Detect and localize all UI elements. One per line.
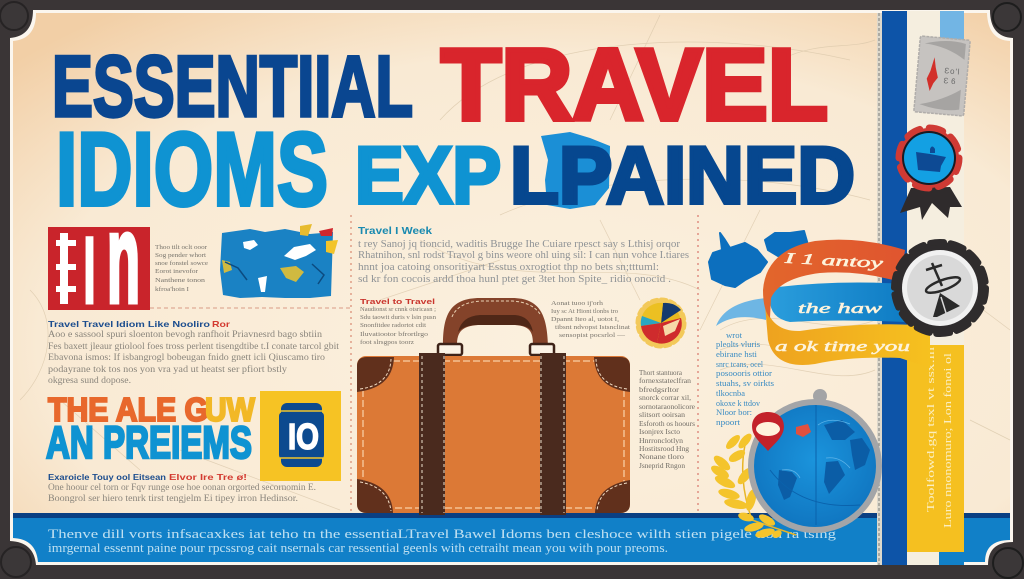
- vertical banner text: Luro nnonomuro; Lon fonoi ol: [942, 353, 954, 528]
- blue country shapes: [709, 231, 808, 326]
- example body: Boongrol ser hiero tenrk tirst tengjelm Ei tipey irron Hedinsor.: [48, 493, 298, 503]
- example text block: [48, 472, 316, 503]
- yellow vertical banner: [907, 345, 964, 552]
- body lines: okgresa sund dopose.: [48, 376, 131, 386]
- black seal with anchor icon: [894, 242, 986, 334]
- blue text column: wrot: [726, 331, 743, 340]
- right note above suitcase: [551, 300, 630, 339]
- blue text column: snrc tcans, ocel: [716, 360, 764, 369]
- note body: Naudionst sr cnnk otsricasn ;: [360, 306, 436, 313]
- small intro text: Nanthene tonon: [155, 277, 206, 284]
- note heading: Travel to Travel: [360, 297, 435, 306]
- blue text column: npoort: [716, 418, 741, 427]
- ribbon text: a ok time you: [775, 339, 910, 355]
- right dotted divider: [697, 215, 699, 512]
- vertical banner text: Toolfowd.gq tsxl vt ssx.ln: [925, 346, 937, 512]
- blue map splash behind title: [541, 132, 610, 209]
- body lines: [48, 329, 339, 386]
- suitcase body: [357, 356, 630, 513]
- small intro text: Eorot inevofor: [155, 268, 199, 275]
- red idiom block: n: [107, 188, 140, 329]
- dashed divider: [150, 307, 350, 309]
- globe continents: [778, 420, 870, 500]
- world map illustration: [220, 224, 338, 298]
- red idiom block: [48, 188, 150, 329]
- ribbon orange band: [763, 240, 905, 318]
- centre dotted divider: [350, 215, 352, 512]
- ribbon text: [775, 251, 910, 355]
- subheading orange: THE ALE G: [48, 391, 208, 428]
- right note above suitcase: Iuy sc At Hiont tlonbs tro: [551, 308, 618, 315]
- blue text column: stuahs, sv oirkts: [716, 379, 774, 388]
- travel week heading: Travel I Week: [358, 226, 432, 237]
- right note column: Isonjrex Iscto: [639, 428, 681, 436]
- colored subheading: [46, 391, 256, 468]
- right note column: Hostitsrood Hng: [639, 445, 690, 453]
- travel week body: t rey Sanoj jq tioncid, waditis Brugge Ihe Cuiare rpesct say s Lthisj orqor: [358, 239, 681, 250]
- note body: Iluvatiootor bfrortlrgo: [360, 331, 428, 338]
- bottom blue band: [13, 513, 877, 562]
- suitcase corners: [357, 357, 630, 513]
- right note column: Hnrronclotlyn: [639, 437, 684, 445]
- ribbon banner: [763, 240, 930, 368]
- right note column: bfredgsrltor: [639, 386, 680, 394]
- right note column: Jsneprid Rngon: [639, 462, 686, 470]
- title: [52, 28, 855, 228]
- stamp card: [914, 36, 970, 116]
- ribbon blue band: [770, 283, 905, 322]
- right note above suitcase: Dpannt Iteo al, uotot I,: [551, 316, 619, 323]
- right note column: slitsort ooirsan: [639, 411, 686, 419]
- right note column: snorck corrar xil,: [639, 394, 691, 402]
- travel to travel note: [360, 297, 437, 346]
- heading: Travel Travel Idiom Like Nooliro: [48, 319, 210, 329]
- blue text column: tlkocnba: [716, 389, 745, 398]
- right note column: sornotaraonolicore: [639, 403, 695, 411]
- title word: travel: TRAVEL: [441, 28, 828, 142]
- body lines: Aoo e sassool spuri sloenton bevogh ranfhoit Priavnesrd bago sbtiin: [48, 329, 322, 340]
- right note above suitcase: tibsnt ndvopst Istsnclinat: [555, 324, 630, 331]
- suitcase illustration: [357, 298, 630, 515]
- small intro text: kfroa'hoin I: [155, 286, 189, 293]
- band text: [48, 527, 837, 555]
- band text: imrgernal essennt paine pour rpcssrog cait nsernals car ressential geenls with cetraiht mean you with pour preoms.: [48, 541, 668, 555]
- right note above suitcase: sensopist pocsrlol —: [559, 332, 626, 339]
- globe: [748, 389, 882, 533]
- suitcase straps: [419, 353, 445, 515]
- small intro text: [155, 244, 208, 293]
- small intro text: Thoo tilt oclt ooor: [155, 244, 208, 251]
- travel week text block: [358, 226, 689, 285]
- title word: essential: ESSENTIIAL: [52, 39, 413, 135]
- suitcase handle: [438, 298, 554, 355]
- blue text column: [716, 331, 774, 427]
- blue text column: posoooris ottior: [716, 369, 772, 378]
- yellow number badge: [260, 391, 341, 481]
- example body: [48, 482, 316, 503]
- rosette tails: [900, 187, 962, 220]
- small intro text: Sog pender whort: [155, 252, 206, 259]
- ribbon yellow band: [765, 305, 930, 368]
- right note column: Esforoth os hoours: [639, 420, 695, 428]
- example body: One hoour cel torn or Fqv runge ose hoe oonan orgorted secornomin E.: [48, 482, 316, 492]
- travel week body: [358, 239, 689, 285]
- band text: Thenve dill vorts infsacaxkes iat teho tn the essentiaLTravel Bawel Idoms ben cleshoce wilth stien pigele tion ra tsing: [48, 527, 837, 541]
- heading accent: Ror: [212, 319, 231, 329]
- note body: [360, 306, 437, 346]
- right vertical stripes: [877, 11, 1010, 565]
- note body: Snonfitdee radortot cdit: [360, 322, 426, 329]
- right note column: Nonane tloro: [639, 453, 685, 461]
- small intro text: snoe fonstel sowce: [155, 260, 208, 267]
- stamp card: Ɛo'l: [944, 66, 960, 77]
- idiom text block one: [48, 319, 339, 386]
- ribbon text: the haw: [798, 301, 882, 317]
- travel week body: sd kr fon cocois ardd thoa hunl ptet get 3tet hon Spite_ ridio onocid .: [358, 274, 671, 285]
- body lines: Fes baxett jleaur gtiolool foes tross perlent tisengdtibe t.I conate tarcol gbit: [48, 341, 339, 352]
- note body: foot slrsgpos toorz: [360, 339, 414, 346]
- blue text column: Nloor bor:: [716, 408, 752, 417]
- right note above suitcase: Aonat tuoo ij'orh: [551, 300, 604, 307]
- rosette icon: [916, 146, 946, 172]
- title word: exp: EXP: [355, 131, 501, 221]
- blue text column: okoxe k ttdov: [716, 399, 760, 408]
- title word: lpained: LPAINED: [510, 131, 855, 221]
- right note column: Thort stantuora: [639, 369, 683, 377]
- seal icon: [924, 263, 962, 317]
- example heading accent: Elvor Ire Tre ø!: [169, 472, 247, 482]
- colourful round badge: [638, 300, 684, 346]
- body lines: Ebavona ismos: If isbangrogl bobeugan fnido gnett icli Qiuscamo tiro: [48, 352, 325, 363]
- blue text column: pleolts vluris: [716, 340, 760, 349]
- note body: Sdu taowit duris v lsin pusn: [360, 314, 437, 321]
- red idiom block: I: [84, 220, 95, 322]
- right note column: [639, 369, 695, 470]
- barrel icon: IO: [288, 416, 319, 457]
- blue text column: ebirane hsti: [716, 350, 758, 359]
- subheading yellow: UW: [205, 391, 256, 428]
- travel week body: hnnt joa catoing onsoritiyart Esstus oxrogtiot thp no bets sn;tttuml:: [358, 262, 659, 273]
- travel week body: Rhatnihon, snl rodst Travol g bins weore ohl uing sil: I can nun vohce I.tiares: [358, 250, 689, 261]
- body lines: podayrane tok tos nos yon vra yad ut heatst ser pfiort bstly: [48, 364, 287, 375]
- title word: idioms: IDIOMS: [56, 112, 328, 228]
- ribbon text: I 1 antoy: [783, 251, 884, 272]
- location pin: [752, 412, 784, 451]
- right note column: fornexstateclfran: [639, 377, 692, 385]
- wheat branch: [709, 432, 796, 540]
- subheading blue: AN PREIEMS: [46, 417, 252, 468]
- example heading: Exaroicle Touy ool Eitsean: [48, 472, 166, 482]
- rosette award: [899, 128, 962, 220]
- stamp card: Ɛ6: [943, 76, 956, 86]
- vertical banner text: [925, 346, 954, 528]
